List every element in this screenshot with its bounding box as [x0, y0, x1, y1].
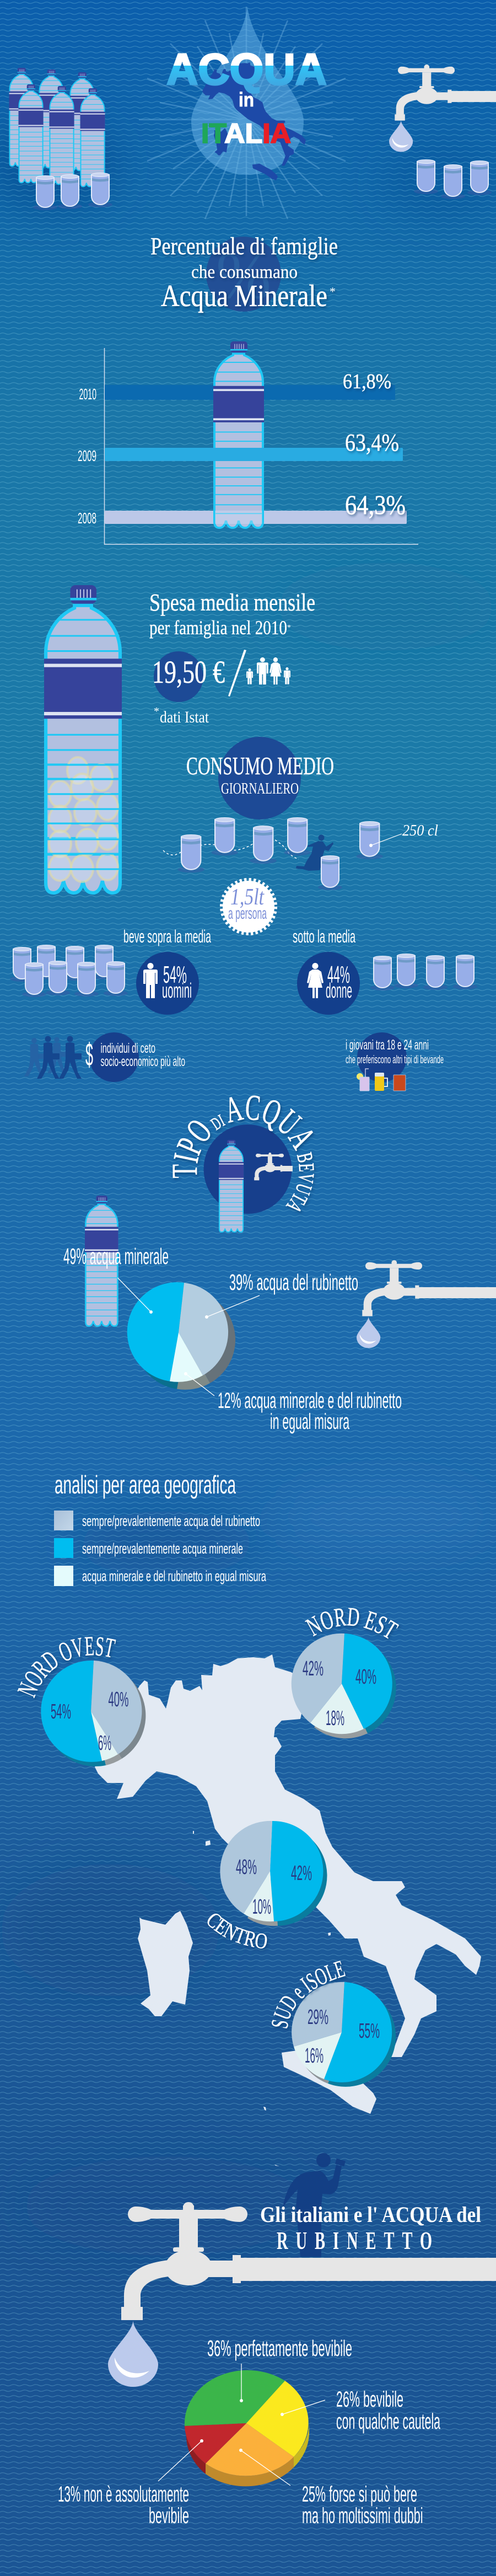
pie: centro: 10%: [252, 1895, 271, 1919]
years: 2010: [79, 385, 96, 403]
heading emblem: tipo di acqua bevuta: [172, 1095, 316, 1233]
pie: centro: 48%: [236, 1856, 257, 1879]
legend: [54, 1511, 267, 1586]
side: [298, 1986, 396, 2087]
pie: centro: [207, 1821, 327, 1951]
pie: nord est: 40%: [355, 1665, 376, 1689]
panel: ceto socio-economico: $: [85, 1037, 93, 1073]
label 25: [239, 2449, 423, 2528]
slice yellow: [246, 2381, 309, 2457]
label 12: in egual misura: [270, 1410, 349, 1434]
pie: nord ovest: 40%: [108, 1688, 129, 1711]
bar chart: famiglie 2008-2010: 2008: [78, 510, 96, 527]
values: 64,3%: [345, 489, 406, 520]
panel: ceto socio-economico: socio-economico più alto: [100, 1054, 185, 1069]
heading: percentuale di famiglie: *: [330, 285, 336, 298]
bar 2008: [105, 511, 407, 524]
panel: donne sotto la media: 44%: [327, 961, 350, 988]
pie: centro: 42%: [291, 1862, 312, 1885]
panel: donne sotto la media: donne: [326, 979, 352, 1003]
pie side: [134, 1290, 235, 1390]
tap with drop: [357, 1260, 496, 1348]
heading: percentuale di famiglie: %: [216, 239, 271, 312]
250 cl callout: [369, 822, 438, 847]
title ITALIA: ITALIA: [201, 118, 291, 149]
side: [314, 1638, 396, 1738]
pie: nord ovest: 6%: [98, 1732, 111, 1755]
badge: 1,5 lt a persona: [222, 880, 276, 934]
water drop: [191, 7, 304, 175]
panel: ceto socio-economico: [24, 1032, 185, 1082]
heading: percentuale di famiglie: che consumano: [191, 262, 298, 282]
consumo medio giornaliero: [163, 737, 438, 890]
heading: gli italiani e l'acqua del rubinetto: RUBINETTO: [277, 2227, 432, 2255]
label 36: 36% perfettamente bevibile: [207, 2336, 352, 2361]
slices: [270, 1821, 324, 1921]
big bottle with pebbles: [44, 585, 122, 893]
pie: nord est: 18%: [326, 1707, 344, 1730]
woman icon: [307, 963, 324, 998]
glasses: [177, 818, 383, 890]
header: tap, drop and glasses: [389, 65, 496, 199]
drinks: [357, 1069, 406, 1091]
panel: uomini sopra la media: uomini: [162, 979, 192, 1003]
bar 2010: [105, 385, 395, 400]
heading: sotto la media: [293, 926, 355, 946]
walking people: [24, 1036, 82, 1079]
circle: [297, 952, 360, 1015]
circle behind price: [154, 651, 203, 702]
text: individui di ceto: [100, 1041, 155, 1056]
pie: sud e isole: 55%: [359, 2020, 380, 2043]
label 13: [58, 2439, 203, 2528]
slice red: [185, 2423, 246, 2463]
drinking man silhouette: [283, 2153, 346, 2257]
map of Italy: [95, 1654, 481, 2166]
tap: [254, 1153, 293, 1180]
spesa media mensile: per famiglia nel 2010: [149, 617, 287, 639]
header: bottles and glasses: [9, 68, 112, 210]
text: i giovani tra 18 e 24 anni: [346, 1037, 429, 1053]
values: 61,8%: [343, 370, 391, 393]
circle: [204, 1124, 292, 1214]
arc heading: TIPO DI ACQUA BEVUTA: [172, 1095, 316, 1213]
pie: nord ovest: [18, 1637, 145, 1766]
heading: percentuale di famiglie: Percentuale di famiglie: [150, 233, 338, 260]
slices: [342, 1634, 392, 1729]
circle: [136, 952, 199, 1015]
heading: Spesa media mensile: [149, 589, 315, 616]
spesa media mensile: dati Istat: [160, 708, 209, 726]
circle: [218, 737, 301, 820]
panel: uomini sopra la media: 54%: [163, 961, 187, 988]
price: 19,50 €: [152, 654, 225, 690]
spesa media mensile: [149, 589, 315, 726]
pie: sud e isole: 29%: [308, 2006, 328, 2029]
pie: sud e isole: 16%: [305, 2044, 324, 2068]
bottle: [85, 1196, 118, 1326]
title ACQUA: ACQUA: [166, 45, 327, 94]
consumo medio giornaliero: GIORNALIERO: [221, 780, 299, 797]
slice: in egual misura: [170, 1332, 203, 1382]
label 39: 39% acqua del rubinetto: [229, 1270, 358, 1295]
heading: CONSUMO MEDIO: [186, 752, 334, 780]
slices: [324, 1982, 392, 2082]
label 26: [281, 2387, 440, 2434]
legend: acqua minerale e del rubinetto in egual misura: [82, 1568, 267, 1584]
label 36: [207, 2336, 352, 2402]
label 39: [205, 1270, 358, 1319]
legend: sempre/prevalentemente acqua del rubinetto: [82, 1513, 260, 1529]
heading: percentuale di famiglie: Acqua Minerale: [161, 279, 327, 313]
arc heading: NORD EST: [305, 1608, 400, 1641]
title in: in: [239, 88, 254, 111]
arc heading: SUD e ISOLE: [272, 1961, 347, 2031]
circle: [357, 1032, 407, 1082]
pie: tipo di acqua: [63, 1196, 402, 1434]
slices: [41, 1661, 102, 1762]
slice: acqua del rubinetto: [179, 1283, 228, 1375]
bar chart: famiglie 2008-2010: [78, 341, 418, 544]
legend: sempre/prevalentemente acqua minerale: [82, 1540, 243, 1557]
side: [247, 1825, 327, 1926]
pie: nord est: 42%: [303, 1657, 324, 1680]
slice orange: [206, 2423, 294, 2476]
side: [45, 1665, 145, 1766]
arc heading: NORD OVEST: [18, 1637, 118, 1700]
glasses: [10, 945, 128, 997]
light rays: [139, 7, 354, 219]
panel: giovani: [346, 1032, 444, 1091]
bottle overlay 2008: [215, 511, 262, 524]
label 13: bevibile: [149, 2504, 189, 2528]
pie: acqua del rubinetto: [58, 2336, 440, 2528]
heading: percentuale di famiglie: [150, 233, 338, 313]
spesa media mensile: *: [287, 624, 291, 632]
bar 2009: [105, 448, 403, 461]
label 26: 26% bevibile: [336, 2387, 403, 2412]
heading: beve sopra la media: [123, 926, 211, 946]
values: 63,4%: [345, 429, 399, 456]
label 12: [184, 1372, 402, 1434]
note: *: [154, 705, 159, 717]
label 13: 13% non è assolutamente: [58, 2482, 189, 2507]
pie: nord ovest: 54%: [51, 1700, 71, 1723]
map of Italy: [202, 62, 306, 180]
circle: [89, 1032, 139, 1082]
label 49: 49% acqua minerale: [63, 1244, 169, 1269]
pie: sud e isole: [272, 1961, 396, 2087]
big tap with drop: [108, 2202, 496, 2387]
side: [185, 2424, 309, 2486]
bottle: [213, 341, 264, 528]
bottle: [219, 1140, 244, 1232]
bar chart: famiglie 2008-2010: 2009: [78, 447, 96, 464]
badge: 1,5 lt a persona: a persona: [228, 904, 267, 923]
label 49: [63, 1244, 169, 1314]
badge: 1,5 lt a persona: 1,5lt: [230, 885, 265, 910]
pie: nord est: [291, 1608, 400, 1738]
values: [343, 370, 406, 520]
250 cl callout: 250 cl: [402, 822, 438, 839]
slash: [228, 650, 246, 697]
glasses: [370, 954, 477, 990]
dashed path: [163, 840, 299, 859]
slice green: [185, 2370, 285, 2426]
axes: [105, 348, 418, 544]
panel: uomini sopra la media: [10, 926, 211, 1015]
heading: analisi per area geografica: analisi per area geografica: [55, 1470, 236, 1499]
heading: gli italiani e l'acqua del rubinetto: [260, 2202, 481, 2255]
slice: acqua minerale: [127, 1282, 184, 1381]
arc heading: CENTRO: [207, 1914, 269, 1951]
running man: [296, 835, 333, 871]
panel: donne sotto la media: [293, 926, 477, 1015]
man icon: [143, 963, 158, 998]
header: title emblem with drop, rays and Italy: [139, 7, 354, 219]
family icons: [246, 657, 290, 684]
